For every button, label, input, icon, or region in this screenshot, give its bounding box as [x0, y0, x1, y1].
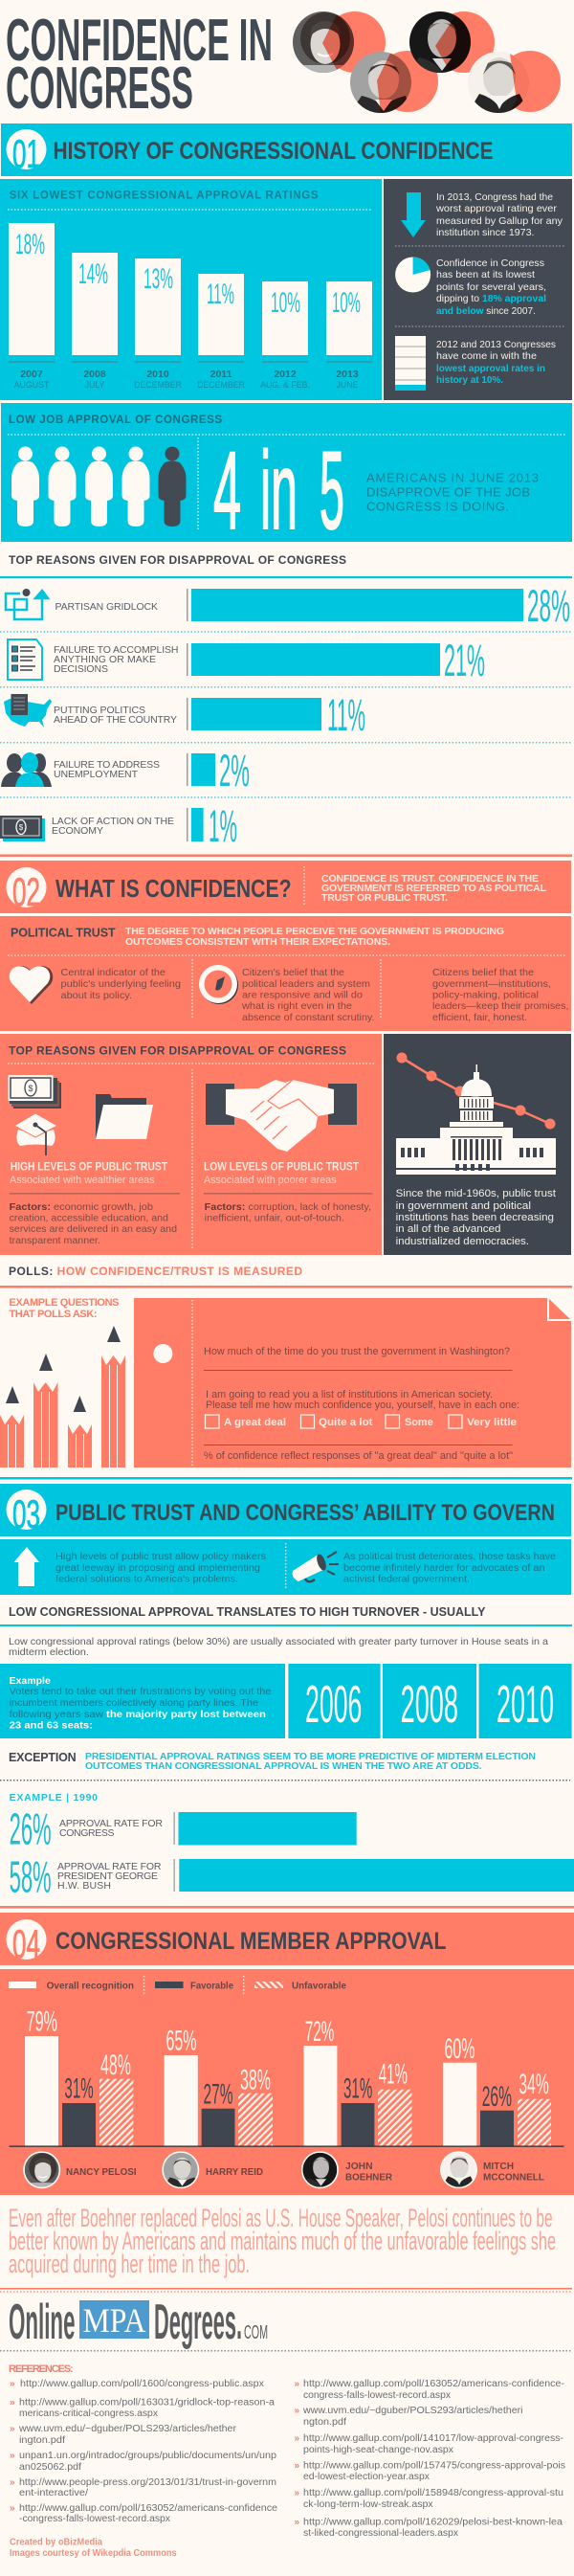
icon: capitol building [396, 1064, 556, 1175]
portrait and name: Harry Reid: HARRY REID [206, 2166, 263, 2178]
section 01 header band [1, 123, 572, 176]
icon: pie chart [395, 257, 430, 293]
panel: member approval chart [0, 1969, 574, 2195]
references: right column: ngton.pdf [303, 2417, 346, 2428]
bar values: 13% [144, 263, 173, 295]
row: lack of action on the economy: LACK OF ACTION ON THE [52, 816, 174, 827]
column: high levels of public trust [10, 1160, 180, 1246]
answer options [205, 1415, 517, 1428]
years and months: 2013 [336, 369, 359, 380]
references: left column: » [10, 2477, 15, 2488]
text: worst approval rating: measured by Gallup for any [436, 215, 563, 227]
line chart: declining trust [396, 1053, 555, 1130]
portrait and name: Nancy Pelosi [23, 2151, 137, 2188]
bar group: Reid: 65% [166, 2026, 197, 2057]
text: confidence is trust: TRUST OR PUBLIC TRUST. [321, 892, 448, 904]
text: example [10, 1675, 272, 1731]
heading: what is confidence: WHAT IS CONFIDENCE? [55, 874, 291, 903]
heading: polls: POLLS: HOW CONFIDENCE/TRUST IS MEASURED [9, 1265, 302, 1278]
text: worst approval rating [435, 191, 563, 238]
icon: stacked levels [395, 336, 426, 391]
references: left column: » [10, 2424, 15, 2434]
text: exception: EXCEPTION [9, 1751, 77, 1764]
references: right column: http://www.gallup.com/poll/157475/congress-approval-pois [303, 2461, 565, 2472]
definition: THE DEGREE TO WHICH PEOPLE PERCEIVE THE GOVERNMENT IS PRODUCING [125, 926, 504, 937]
years and months [14, 369, 359, 390]
text: exception: PRESIDENTIAL APPROVAL RATINGS SEEM TO BE MORE PREDICTIVE OF MIDTERM ELECTION [85, 1751, 536, 1762]
answer options: A great deal [224, 1417, 286, 1428]
text: exception: OUTCOMES THAN CONGRESSIONAL APPROVAL IS WHEN THE TWO ARE AT ODDS. [85, 1760, 482, 1772]
text: americans disapprove: DISAPPROVE OF THE JOB [366, 484, 530, 500]
references: right column: http://www.gallup.com/poll/141017/low-approval-congress- [303, 2433, 563, 2444]
text: citizens belief promises: efficient, fair, honest. [432, 1012, 527, 1023]
years: 2008 [401, 1674, 458, 1734]
portrait and name: John Boehner: JOHN [345, 2161, 373, 2172]
icon: stack of money [8, 1075, 61, 1109]
text: americans disapprove: CONGRESS IS DOING. [366, 500, 509, 513]
text: high levels: High levels of public trust allow policy makers [55, 1551, 266, 1562]
logo: OnlineMPADegrees.com: Degrees. [154, 2295, 242, 2350]
column: high levels of public trust: Factors: economic growth, job [10, 1201, 153, 1213]
panel: levels of public trust [0, 1034, 382, 1255]
row: president approval: APPROVAL RATE FOR [57, 1861, 162, 1872]
footnote: % of confidence reflect responses of "a great deal" and "quite a lot" [204, 1450, 513, 1462]
years and months: 2007 [20, 369, 43, 380]
bar group: Pelosi: 48% [100, 2050, 131, 2081]
section 02 header band [0, 861, 571, 914]
references: right column: congress-falls-lowest-record.aspx [303, 2390, 451, 2401]
bar group: Pelosi [25, 2006, 133, 2146]
text: trust deteriorates: As political trust deteriorates, those tasks have [343, 1551, 556, 1562]
portraits: four congressional leaders [293, 11, 561, 113]
number badge 04 [6, 1919, 46, 1966]
chart heading: SIX LOWEST CONGRESSIONAL APPROVAL RATINGS [10, 190, 319, 201]
references: right column: points-high-seat-change-nov.aspx [303, 2445, 453, 2455]
answer options: Quite a lot [319, 1417, 373, 1428]
text: citizens belief promises: Citizens belief that the [432, 967, 534, 978]
title [6, 8, 273, 122]
credits: Images courtesy of Wikepdia Commons [10, 2548, 177, 2559]
row: failure to accomplish: DECISIONS [54, 663, 108, 675]
references: right column: http://www.gallup.com/poll/162029/pelosi-best-known-lea [303, 2518, 563, 2528]
portrait and name: Harry Reid [162, 2151, 263, 2188]
portrait and name: Mitch McConnell: MITCH [483, 2161, 514, 2172]
big stat: 4 in 5: 4 [213, 430, 241, 552]
references: left column: mericans-critical-congress.aspx [19, 2408, 158, 2419]
text: worst approval rating: In 2013, Congress had the [436, 191, 553, 203]
text: central indicator: public's underlying feeling [61, 978, 181, 990]
text: example questions: EXAMPLE QUESTIONS [10, 1297, 119, 1309]
icon: gridlock arrow [6, 589, 48, 619]
heading: history of congressional confidence: HISTORY OF CONGRESSIONAL CONFIDENCE [54, 138, 494, 165]
years and months: 2012 [274, 369, 297, 380]
chart: disapproval reasons: 11% [327, 689, 365, 740]
credits [10, 2538, 177, 2559]
references: left column: http://www.people-press.org/2013/01/31/trust-in-governm [19, 2477, 276, 2488]
text: low approval description: midterm election. [9, 1646, 89, 1658]
bar group: Reid: 38% [240, 2065, 271, 2096]
text: example: Example [10, 1675, 51, 1687]
bar values: 10% [271, 287, 300, 319]
text: since the mid-1960s: industrialized democracies. [396, 1236, 529, 1247]
text: lowest approval rates: 2012 and 2013 Congresses [436, 339, 556, 350]
text: lowest approval rates: have come in with the [436, 350, 537, 362]
heading: congressional member approval: CONGRESSIONAL MEMBER APPROVAL [55, 1928, 446, 1955]
text: citizens belief promises: leaders—keep their promises, [432, 1000, 568, 1012]
row: congress approval: CONGRESS [59, 1827, 115, 1839]
text: citizen's belief responsive: absence of constant scrutiny. [242, 1012, 375, 1023]
panel: low job approval [1, 403, 572, 552]
text: citizen's belief responsive: Citizen's belief that the [242, 967, 344, 978]
text: confidence lowest points: dipping to 18% approval [436, 293, 546, 304]
column: low levels of public trust [204, 1160, 373, 1224]
text: since the mid-1960s: in government and political [396, 1200, 531, 1212]
text: example: Voters tend to take out their frustrations by voting out the [10, 1686, 272, 1697]
portrait and name: Mitch McConnell: MCCONNELL [483, 2171, 545, 2183]
title: CONFIDENCE IN [6, 8, 273, 74]
column: high levels of public trust: services are delivered in an easy and [10, 1223, 177, 1235]
answer options: Some [405, 1417, 433, 1428]
icon: gauge [199, 965, 238, 1004]
row: lack of action on the economy: ECONOMY [52, 825, 103, 837]
row: president approval: H.W. BUSH [57, 1880, 111, 1892]
chart: disapproval reasons: 1% [209, 800, 237, 851]
big stat: 4 in 5: in [260, 430, 298, 552]
icon: handshake [206, 1080, 357, 1152]
text: confidence is trust: CONFIDENCE IS TRUST. CONFIDENCE IN THE [321, 873, 539, 885]
references: left column: » [10, 2503, 15, 2514]
number badge 03: 03 [12, 1491, 40, 1536]
legend: Favorable [190, 1980, 233, 1991]
years and months: 2008 [83, 369, 106, 380]
question 1: How much of the time do you trust the government in Washington? [204, 1346, 510, 1357]
icon: up arrow [13, 1547, 39, 1586]
text: citizen's belief responsive: are responsive and will do [242, 990, 363, 1001]
section 03 header band [0, 1484, 571, 1536]
icon: US map with document [4, 694, 52, 728]
bar group: McConnell: 26% [482, 2081, 512, 2113]
panel: dark facts column [384, 179, 572, 400]
portrait and name: Nancy Pelosi: NANCY PELOSI [66, 2166, 137, 2178]
text: lowest approval rates: lowest approval rates in [436, 363, 545, 374]
text: lowest approval rates [436, 339, 556, 386]
text: example questions: THAT POLLS ASK: [10, 1309, 98, 1320]
number badge 01 [6, 129, 46, 176]
years and months: AUG. & FEB. [260, 380, 310, 390]
section 04 header band [0, 1913, 574, 1966]
icon: megaphone [293, 1552, 339, 1581]
row: congress approval [10, 1804, 357, 1854]
bar values [15, 229, 361, 319]
references: left column: -congress-falls-lowest-record.aspx [19, 2514, 170, 2524]
references heading: REFERENCES: [9, 2363, 74, 2375]
text: exception [9, 1751, 536, 1772]
chart: disapproval reasons: 2% [219, 745, 250, 795]
references: left column [10, 2379, 277, 2524]
heading: top reasons for disapproval: TOP REASONS GIVEN FOR DISAPPROVAL OF CONGRESS [9, 553, 346, 567]
big stat: 4 in 5 [213, 430, 344, 552]
bar group: Boehner: 41% [379, 2059, 408, 2091]
references: left column: ington.pdf [19, 2435, 65, 2446]
row: failure to accomplish: FAILURE TO ACCOMPLISH [54, 644, 178, 656]
row: failure to accomplish [8, 635, 485, 685]
text: since the mid-1960s: institutions has been decreasing [396, 1212, 554, 1223]
definition: OUTCOMES CONSISTENT WITH THEIR EXPECTATIONS. [125, 936, 390, 948]
definition [125, 926, 504, 948]
credits: Created by oBizMedia [10, 2538, 102, 2548]
text: central indicator [61, 967, 181, 1001]
text: example: following years saw the majority party lost between [10, 1709, 266, 1720]
text: worst approval rating: worst approval rating ever [435, 203, 558, 214]
text: trust deteriorates [343, 1551, 556, 1585]
references: right column: » [295, 2461, 300, 2472]
bar group: Boehner: 72% [305, 2016, 334, 2048]
icon: dollar bill [0, 816, 45, 841]
years and months: JULY [85, 380, 105, 390]
icon: dollar bill: $ [19, 823, 24, 832]
row: partisan gridlock: PARTISAN GRIDLOCK [55, 601, 158, 613]
heading: LOW JOB APPROVAL OF CONGRESS [9, 414, 222, 426]
references: right column: www.uvm.edu/~dguber/POLS293/articles/hetheri [302, 2406, 522, 2416]
portrait and name: John Boehner: BOEHNER [345, 2171, 392, 2183]
legend: Overall recognition [47, 1980, 134, 1991]
column: low levels of public trust: Associated with poorer areas [204, 1175, 337, 1186]
text: central indicator: Central indicator of the [61, 967, 166, 978]
references: left column: ent-interactive/ [19, 2488, 88, 2498]
row: president approval: PRESIDENT GEORGE [57, 1870, 158, 1882]
row: lack of action on the economy [0, 800, 237, 851]
text: trust deteriorates: become infinitely harder for advocates of an [343, 1562, 545, 1574]
chart: disapproval reasons [0, 580, 571, 851]
references: right column: » [295, 2379, 300, 2389]
text: Pelosi conclusion: acquired during her time in the job. [9, 2250, 250, 2278]
example 1990 comparison [10, 1792, 574, 1902]
icon: down arrow [401, 192, 426, 237]
references: left column: » [10, 2379, 15, 2389]
text: citizens belief promises [432, 967, 568, 1023]
icon: pencils [0, 1326, 125, 1467]
references: left column: an025062.pdf [19, 2462, 81, 2473]
text: example: incumbent members collectively along party lines. The [10, 1697, 258, 1709]
panel: midterm example [0, 1664, 572, 1738]
column: high levels of public trust: Associated with wealthier areas [10, 1175, 155, 1186]
icon: graduation cap [14, 1113, 57, 1155]
references: left column: » [10, 2398, 15, 2408]
row: failure to address unemployment: UNEMPLOYMENT [54, 769, 139, 780]
row: president approval [10, 1852, 574, 1902]
heading: POLITICAL TRUST [11, 927, 116, 940]
text: confidence lowest points [436, 258, 546, 317]
years [305, 1674, 554, 1734]
bar values: 11% [207, 279, 234, 310]
bar group: Boehner: 31% [343, 2073, 372, 2105]
title: CONGRESS [6, 56, 193, 122]
text: example: 23 and 63 seats: [10, 1719, 93, 1731]
portrait and name: Mitch McConnell [440, 2151, 545, 2188]
row: failure to address unemployment [1, 745, 250, 795]
text: confidence is trust [321, 873, 547, 904]
text: example questions [10, 1297, 119, 1320]
text: citizen's belief responsive: what is right even in the [241, 1000, 352, 1012]
text: confidence lowest points: and below since 2007. [436, 305, 536, 317]
references: right column [295, 2379, 565, 2539]
row: partisan gridlock [6, 580, 570, 631]
panel: poll ticket [134, 1298, 571, 1467]
panel: six lowest approval ratings bar chart: 10% [332, 287, 361, 319]
text: worst approval rating: institution since 1973. [436, 227, 534, 238]
references: right column: » [295, 2406, 300, 2416]
fold corner [548, 1298, 571, 1320]
years and months: JUNE [337, 380, 359, 390]
row: failure to accomplish: ANYTHING OR MAKE [54, 654, 156, 665]
icon: stack of money: $ [28, 1084, 33, 1093]
text: citizen's belief responsive: political leaders and system [242, 978, 370, 990]
text: confidence lowest points: has been at its lowest [436, 269, 535, 280]
text: central indicator: about its policy. [61, 990, 132, 1001]
row: failure to address unemployment: FAILURE TO ADDRESS [54, 759, 160, 771]
text: confidence is trust: GOVERNMENT IS REFERRED TO AS POLITICAL [321, 883, 547, 894]
heading: low approval translates to high turnover: LOW CONGRESSIONAL APPROVAL TRANSLATES TO HIGH TURNOVER - USUALLY [9, 1605, 486, 1619]
references: left column: http://www.gallup.com/poll/163052/americans-confidence [19, 2503, 277, 2514]
years and months: DECEMBER [197, 380, 245, 390]
bar group: Pelosi: 79% [27, 2006, 57, 2038]
references: left column: unpan1.un.org/intradoc/groups/public/documents/un/unp [19, 2451, 276, 2461]
logo: OnlineMPADegrees.com: COM [244, 2322, 268, 2343]
number badge 01: 01 [12, 131, 40, 176]
text: high levels [55, 1551, 266, 1585]
text: low approval description: Low congressional approval ratings (below 30%) are usually associated with greater party turnover in House seats in a [9, 1636, 548, 1647]
references: right column: ck-long-term-low-streak.aspx [303, 2499, 433, 2510]
years and months: AUGUST [14, 380, 50, 390]
panel: political trust [0, 916, 571, 1031]
text: since the mid-1960s: Since the mid-1960s, public trust [396, 1188, 556, 1199]
icon: checklist document [8, 639, 42, 680]
logo: OnlineMPADegrees.com: Online [9, 2295, 75, 2350]
panel: capitol and public trust decline [384, 1034, 571, 1255]
bar group: Boehner [304, 2016, 411, 2146]
years: 2006 [305, 1674, 362, 1734]
text: citizens belief promises: government—institutions, [432, 978, 551, 990]
references: left column: http://www.gallup.com/poll/1600/congress-public.aspx [20, 2379, 264, 2389]
heading: TOP REASONS GIVEN FOR DISAPPROVAL OF CONGRESS [9, 1043, 346, 1057]
column: low levels of public trust: Factors: corruption, lack of honesty, [205, 1201, 371, 1213]
logo: OnlineMPADegrees.com: MPA [82, 2301, 145, 2340]
number badge 04: 04 [12, 1921, 40, 1966]
answer options: Very little [467, 1417, 517, 1428]
bar group: Reid: 27% [203, 2079, 233, 2111]
references: right column: st-liked-congressional-leaders.aspx [303, 2528, 458, 2539]
icon: heart [10, 966, 53, 1004]
references: left column: http://www.gallup.com/poll/163031/gridlock-top-reason-a [19, 2398, 275, 2408]
text: lowest approval rates: history at 10%. [436, 374, 503, 386]
bar group: Reid [165, 2026, 273, 2146]
years and months: 2011 [210, 369, 232, 380]
panel: low job approval: 5 [320, 430, 344, 552]
number badge 03 [6, 1490, 46, 1536]
label: EXAMPLE | 1990 [10, 1792, 98, 1803]
text: Pelosi conclusion [9, 2204, 556, 2278]
row: putting politics ahead [4, 689, 365, 740]
references: right column: » [295, 2518, 300, 2528]
text: since the mid-1960s [396, 1188, 556, 1247]
text: confidence lowest points: points for several years, [436, 281, 546, 293]
references: right column: http://www.gallup.com/poll/158948/congress-approval-stu [303, 2488, 563, 2498]
references: right column: » [295, 2488, 300, 2498]
row: putting politics ahead: AHEAD OF THE COUNTRY [54, 714, 177, 726]
legend [9, 1976, 346, 1996]
number badge 02 [6, 867, 46, 914]
text: citizens belief promises: policy-making, political [432, 990, 539, 1001]
chart: disapproval reasons: 21% [444, 635, 485, 685]
row: president approval: 58% [10, 1852, 52, 1902]
text: confidence lowest points: Confidence in Congress [436, 258, 544, 269]
text: low approval description [9, 1636, 548, 1658]
bar group: McConnell: 60% [444, 2033, 475, 2065]
years and months: DECEMBER [134, 380, 182, 390]
portrait and name: John Boehner [301, 2151, 392, 2188]
references: left column: www.uvm.edu/~dguber/POLS293/articles/hether [18, 2424, 237, 2434]
bar group: Pelosi: 31% [64, 2073, 94, 2105]
icon row: five people [11, 446, 186, 526]
column: high levels of public trust: creation, accessible education, and [10, 1213, 168, 1224]
text: since the mid-1960s: in all of the advanced [396, 1223, 501, 1235]
bar values: 14% [78, 258, 108, 290]
column: high levels of public trust: HIGH LEVELS OF PUBLIC TRUST [11, 1160, 168, 1174]
text: high levels: federal solutions to America's problems. [55, 1574, 238, 1585]
references: right column: » [295, 2433, 300, 2444]
logo: OnlineMPADegrees.com [9, 2295, 268, 2350]
bar values: 18% [15, 229, 45, 260]
bar group: McConnell [443, 2033, 551, 2146]
icon: people silhouettes [1, 752, 52, 787]
text: citizen's belief responsive [241, 967, 375, 1023]
text: high levels: great leeway in proposing and implementing [55, 1562, 260, 1574]
number badge 02: 02 [12, 869, 40, 914]
question 2: Please tell me how much confidence you, yourself, have in each one: [206, 1400, 519, 1411]
row: putting politics ahead: PUTTING POLITICS [54, 705, 145, 716]
references: right column: http://www.gallup.com/poll/163052/americans-confidence- [303, 2379, 564, 2389]
panel: trust and policy makers [0, 1539, 571, 1595]
axis ticks [9, 361, 372, 363]
text: americans disapprove: AMERICANS IN JUNE 2013 [366, 471, 539, 484]
references [9, 2363, 565, 2559]
text: trust deteriorates: activist federal government. [343, 1574, 470, 1585]
column: low levels of public trust: LOW LEVELS OF PUBLIC TRUST [204, 1160, 360, 1174]
panel: six lowest approval ratings bar chart [0, 179, 382, 400]
bars [9, 223, 372, 355]
icon: folder [96, 1094, 153, 1139]
row: congress approval: APPROVAL RATE FOR [59, 1818, 163, 1829]
column: high levels of public trust: transparent manner. [10, 1235, 100, 1246]
question 2: I am going to read you a list of institutions in American society. [206, 1389, 493, 1400]
question 2 [206, 1389, 519, 1411]
references: left column: » [10, 2451, 15, 2461]
references: right column: ed-lowest-election-year.aspx [303, 2472, 430, 2482]
column: low levels of public trust: inefficient, unfair, out-of-touch. [205, 1213, 344, 1224]
text: americans disapprove [366, 471, 539, 513]
legend: Unfavorable [292, 1980, 346, 1991]
row: congress approval: 26% [10, 1804, 52, 1854]
years and months: 2010 [146, 369, 169, 380]
